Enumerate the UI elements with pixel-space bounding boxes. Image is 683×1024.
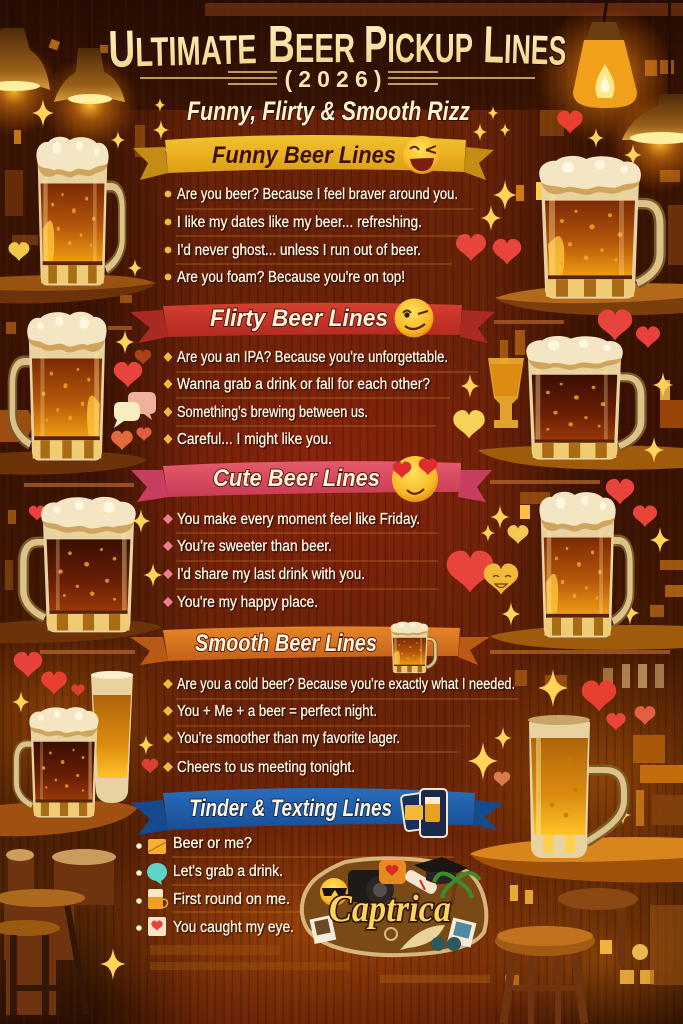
icon: sunglasses emoji: [320, 878, 348, 906]
icon: heart card: [148, 917, 166, 936]
tables and bar tops: [0, 275, 683, 882]
year with flanking rules: (2026): [284, 66, 382, 92]
banner: smooth: Smooth Beer Lines: [195, 630, 377, 657]
list: cute: You're my happy place.: [177, 594, 318, 611]
banner: cute: Cute Beer Lines: [213, 465, 380, 492]
list: cute: You make every moment feel like Friday.: [177, 511, 420, 528]
title: BEER: [268, 16, 355, 74]
icon: camera: [348, 870, 394, 904]
icon: diploma scroll: [403, 868, 439, 896]
list: tinder: Beer or me?: [173, 835, 252, 852]
mug: flirty left: [12, 312, 107, 460]
banner: flirty: [130, 303, 495, 343]
small pint behind flirty mug: [488, 358, 524, 428]
panel: funny beer lines: [133, 135, 494, 286]
icon: phones with beer: [401, 789, 447, 837]
icon: envelope: [148, 839, 166, 854]
list: smooth: Cheers to us meeting tonight.: [177, 759, 355, 776]
list: cute: I'd share my last drink with you.: [177, 566, 365, 583]
list: funny: [165, 186, 474, 286]
icon: heart speech bubble: [379, 860, 406, 884]
title: LINES: [483, 16, 568, 77]
mug: funny right: [539, 156, 660, 299]
list: tinder: [136, 835, 454, 936]
banner: tinder: [131, 788, 503, 835]
icon: heart eyes face: [392, 456, 438, 502]
panel: cute beer lines: [131, 456, 492, 611]
list: funny: I'd never ghost... unless I run out of beer.: [177, 242, 421, 259]
list: flirty: Are you an IPA? Because you're unforgettable.: [177, 349, 448, 366]
mug: flirty right dark beer: [526, 336, 641, 460]
panel: smooth beer lines: [130, 622, 518, 776]
mug: cute left: [23, 497, 136, 632]
decorative hearts: [8, 111, 660, 787]
icon: right bar stools: [495, 888, 638, 1024]
list: funny: Are you beer? Because I feel braver around you.: [177, 186, 458, 203]
icon: left hanging lamp 1: [0, 0, 50, 91]
icon: polaroid photos: [310, 915, 477, 948]
list: smooth: You + Me + a beer = perfect night.: [177, 703, 377, 720]
title: [108, 16, 568, 79]
icon: left bar stools: [0, 849, 116, 1015]
logo: Captrica badge: Captrica: [329, 888, 451, 930]
icon: left hanging lamp 2: [54, 0, 125, 104]
banner: funny: [133, 135, 494, 180]
banner: smooth: [130, 626, 490, 665]
subtitle: Funny, Flirty & Smooth Rizz: [187, 96, 470, 126]
title: ULTIMATE: [108, 17, 257, 79]
pint glass: smooth left: [91, 671, 133, 803]
icon: right hanging lamp: [622, 0, 683, 144]
banner: tinder: Tinder & Texting Lines: [189, 795, 392, 822]
banner: cute: [131, 461, 492, 502]
banner: flirty: Flirty Beer Lines: [210, 305, 388, 332]
list: tinder: Let's grab a drink.: [173, 863, 283, 880]
icon: speech bubble: [147, 863, 167, 885]
list: flirty: Careful... I might like you.: [177, 431, 332, 448]
icon: right bulb lantern: [573, 0, 637, 108]
list: flirty: Wanna grab a drink or fall for each other?: [177, 376, 430, 393]
mug: funny left: [36, 137, 122, 285]
mug: cute right: [539, 492, 630, 638]
logo: Captrica badge: [302, 857, 486, 955]
title: PICKUP: [364, 16, 473, 74]
icon: feather and sunglasses: [385, 925, 461, 951]
list: cute: You're sweeter than beer.: [177, 538, 332, 555]
mug: right lager without foam: [528, 715, 624, 858]
list: funny: Are you foam? Because you're on top!: [177, 269, 405, 286]
icon: beer glass: [148, 889, 168, 909]
icon: heart with smiling face: [484, 563, 518, 594]
list: tinder: You caught my eye.: [173, 919, 294, 936]
lamp glows: [0, 5, 683, 192]
year with flanking rules: [140, 66, 535, 92]
icon: graduation cap: [414, 857, 468, 884]
list: funny: I like my dates like my beer... refreshing.: [177, 214, 422, 231]
mug: smooth left dark beer: [16, 707, 99, 818]
list: flirty: Something's brewing between us.: [177, 404, 368, 421]
list: smooth: [163, 676, 518, 776]
icon: palm tree: [434, 873, 480, 905]
list: smooth: You're smoother than my favorite lager.: [177, 730, 400, 747]
banner: funny: Funny Beer Lines: [212, 142, 396, 169]
icon: winking laughing face: [403, 136, 441, 174]
list: smooth: Are you a cold beer? Because you're exactly what I needed.: [177, 676, 515, 693]
panel: flirty beer lines: [130, 298, 495, 448]
icon: winking face: [394, 298, 434, 338]
icon: chat bubbles: [114, 392, 156, 428]
list: flirty: [164, 349, 478, 448]
icon: mini beer mug: [391, 622, 435, 673]
list: cute: [163, 511, 438, 611]
list: tinder: First round on me.: [173, 891, 290, 908]
panel: tinder and texting lines: [131, 788, 503, 936]
